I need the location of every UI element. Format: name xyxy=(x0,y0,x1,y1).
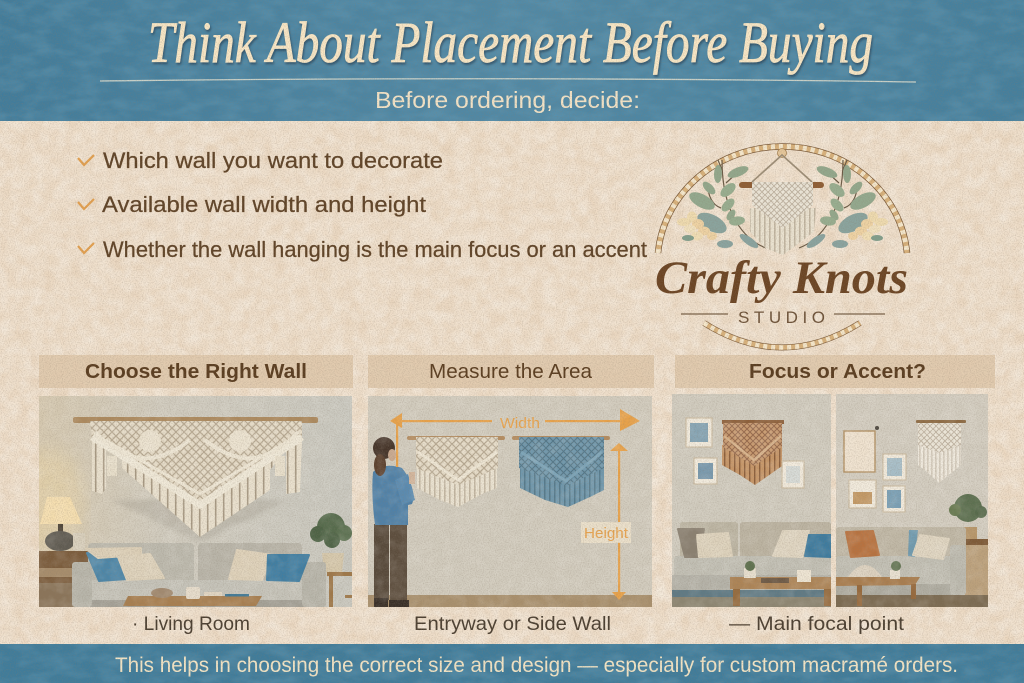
height arrow: Height xyxy=(584,525,629,542)
logo: Crafty Knots Studio xyxy=(655,146,908,348)
subtitle: Before ordering, decide: xyxy=(375,87,640,113)
caption: · Living Room xyxy=(132,614,250,635)
logo studio: STUDIO xyxy=(738,308,825,327)
photo: main focal point xyxy=(672,394,831,607)
heading band xyxy=(675,355,995,388)
title: Think About Placement Before Buying xyxy=(148,10,873,75)
blue hanging xyxy=(512,436,610,507)
rope arc top xyxy=(658,146,907,253)
caption: — Main focal point xyxy=(729,614,905,635)
coffee table xyxy=(123,587,262,606)
check item 1: Which wall you want to decorate xyxy=(103,148,443,173)
macrame hanging xyxy=(73,417,318,542)
heading band xyxy=(39,355,353,388)
footer text: This helps in choosing the correct size and design — especially for custom macramé orders. xyxy=(115,654,958,677)
sofa xyxy=(72,543,326,607)
rope arc bottom xyxy=(704,323,860,348)
logo macrame xyxy=(739,148,824,255)
white hanging xyxy=(916,420,966,483)
photo: accent xyxy=(836,394,988,607)
panel: choose the right wall xyxy=(16,355,353,635)
gallery frames xyxy=(844,426,906,512)
footer band xyxy=(0,644,1024,683)
width arrow xyxy=(390,409,640,467)
logo wordmark: Crafty Knots xyxy=(655,252,908,304)
width arrow: Width xyxy=(500,415,540,432)
check item 2: Available wall width and height xyxy=(102,192,426,217)
person xyxy=(372,437,415,607)
photo: entryway wall xyxy=(368,396,652,607)
panel: focus or accent xyxy=(672,355,995,635)
photo: living room xyxy=(16,396,352,607)
heading band: Focus or Accent? xyxy=(749,361,926,383)
plant xyxy=(310,513,352,607)
lamp and side table xyxy=(39,497,88,607)
checklist xyxy=(78,148,647,262)
terracotta hanging xyxy=(722,420,784,485)
height arrow xyxy=(581,443,631,600)
panel: measure the area xyxy=(368,355,654,635)
plant xyxy=(949,494,988,595)
check item 3: Whether the wall hanging is the main focus or an accent xyxy=(103,237,647,262)
frames xyxy=(686,418,804,488)
heading band: Choose the Right Wall xyxy=(85,361,307,383)
leaves left xyxy=(677,160,766,250)
heading band xyxy=(368,355,654,388)
heading band: Measure the Area xyxy=(429,361,593,383)
caption: Entryway or Side Wall xyxy=(414,614,611,635)
header band xyxy=(0,0,1024,121)
leaves right xyxy=(799,160,888,250)
sofa and table xyxy=(672,522,831,607)
cream hanging xyxy=(407,436,505,507)
sofa and table xyxy=(836,527,988,607)
